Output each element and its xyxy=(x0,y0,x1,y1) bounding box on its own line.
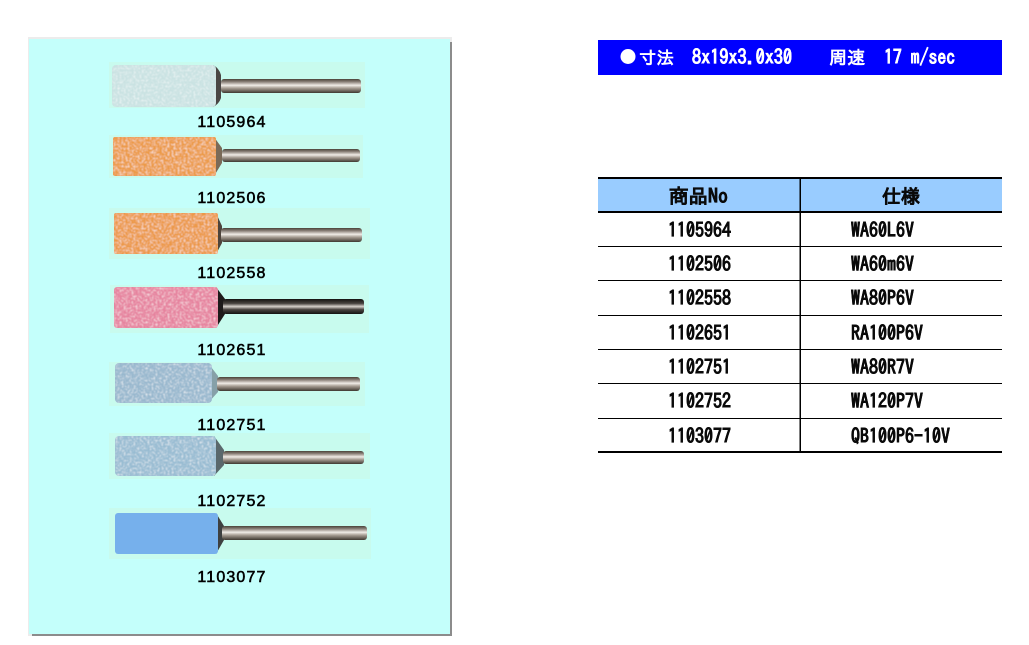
heading bar: dimensions and peripheral speed: 寸法 xyxy=(639,49,674,67)
product photo: 1102558 xyxy=(109,208,370,259)
table header: 仕様 xyxy=(882,186,920,206)
product photo: 1103077 xyxy=(109,508,371,559)
table row: 1102506 xyxy=(668,254,914,274)
label: 1102751: 1102751 xyxy=(197,417,267,434)
table row: 1102506: WA60m6V xyxy=(851,254,914,274)
product photo: 1105964 xyxy=(109,62,365,108)
table row: 1103077: QB100P6-10V xyxy=(851,426,950,446)
product photo: 1102506 xyxy=(109,135,363,178)
heading bar: dimensions and peripheral speed: 周速 xyxy=(829,48,866,67)
table row: 1102558 xyxy=(668,288,914,308)
table row: 1103077: 1103077 xyxy=(668,426,731,446)
table row: 1102752: WA120P7V xyxy=(851,391,923,411)
label: 1102558: 1102558 xyxy=(197,265,267,282)
product photo: 1102751 xyxy=(109,362,365,406)
table row: 1102752: 1102752 xyxy=(668,391,731,411)
table row: 1102558: 1102558 xyxy=(668,288,731,308)
table row: 1102751: WA80R7V xyxy=(851,357,914,377)
table row: 1102651: 1102651 xyxy=(668,323,731,343)
label: 1105964: 1105964 xyxy=(197,114,267,131)
table header: 商品 xyxy=(669,186,708,206)
product photo: 1102651 xyxy=(110,285,369,333)
product photo: 1102752 xyxy=(109,433,370,479)
heading bar: dimensions and peripheral speed: 8x19x3.0x30 xyxy=(692,47,792,67)
panel: product photos xyxy=(28,37,452,636)
label: 1103077: 1103077 xyxy=(197,569,267,586)
table: product numbers and specifications xyxy=(598,177,1002,453)
heading bar: dimensions and peripheral speed: 17 m/sec xyxy=(884,47,955,67)
label: 1102506: 1102506 xyxy=(197,190,267,207)
heading bar: dimensions and peripheral speed xyxy=(598,40,1002,75)
table row: 1105964 xyxy=(668,220,914,240)
table row: 1105964: 1105964 xyxy=(668,220,731,240)
table row: 1102506: 1102506 xyxy=(668,254,731,274)
table header: No xyxy=(708,186,728,206)
table row: 1102751: 1102751 xyxy=(668,357,731,377)
table row: 1102651 xyxy=(668,323,923,343)
table row: 1102651: RA100P6V xyxy=(851,323,923,343)
label: 1102651: 1102651 xyxy=(197,342,267,359)
table header xyxy=(598,179,1002,212)
table row: 1102752 xyxy=(668,391,923,411)
table row: 1102558: WA80P6V xyxy=(851,288,914,308)
label: 1102752: 1102752 xyxy=(197,493,267,510)
table row: 1103077 xyxy=(668,426,950,446)
table row: 1105964: WA60L6V xyxy=(851,220,914,240)
table row: 1102751 xyxy=(668,357,914,377)
